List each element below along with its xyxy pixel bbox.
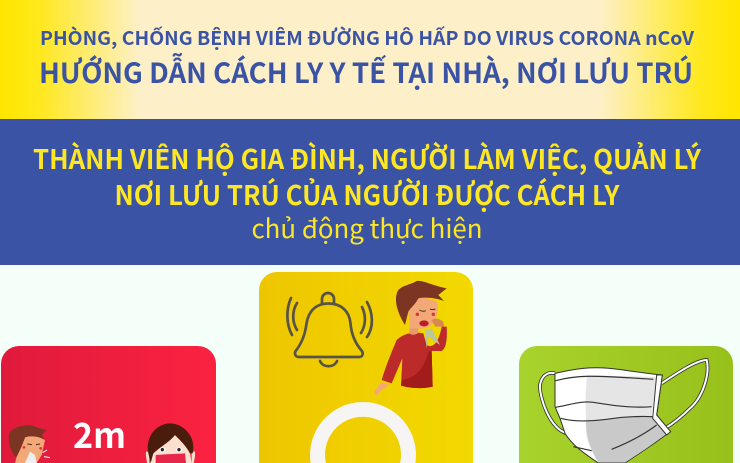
panel: monitor symptoms and notify — [259, 272, 473, 463]
icon: coughing person — [374, 281, 447, 396]
icon: alert bell — [287, 293, 372, 366]
icon: person wearing mask — [146, 423, 195, 463]
icon: sneezing person — [9, 425, 50, 463]
banner heading line 1: THÀNH VIÊN HỘ GIA ĐÌNH, NGƯỜI LÀM VIỆC, QUẢN LÝ — [33, 138, 701, 177]
banner subtext: chủ động thực hiện — [252, 209, 482, 246]
blue banner — [0, 119, 740, 265]
icon: medical mask — [540, 360, 708, 463]
distance label: 2m — [73, 408, 126, 459]
panel: keep 2m distance — [1, 346, 216, 463]
heading: topic line: PHÒNG, CHỐNG BỆNH VIÊM ĐƯỜNG HÔ HẤP DO VIRUS CORONA nCoV — [40, 24, 694, 51]
header band — [0, 0, 740, 119]
icon: white ring timer — [310, 402, 416, 463]
banner heading line 2: NƠI LƯU TRÚ CỦA NGƯỜI ĐƯỢC CÁCH LY — [114, 174, 620, 213]
heading: main title: HƯỚNG DẪN CÁCH LY Y TẾ TẠI NHÀ, NƠI LƯU TRÚ — [39, 52, 693, 92]
panel: wear a mask — [519, 346, 733, 463]
